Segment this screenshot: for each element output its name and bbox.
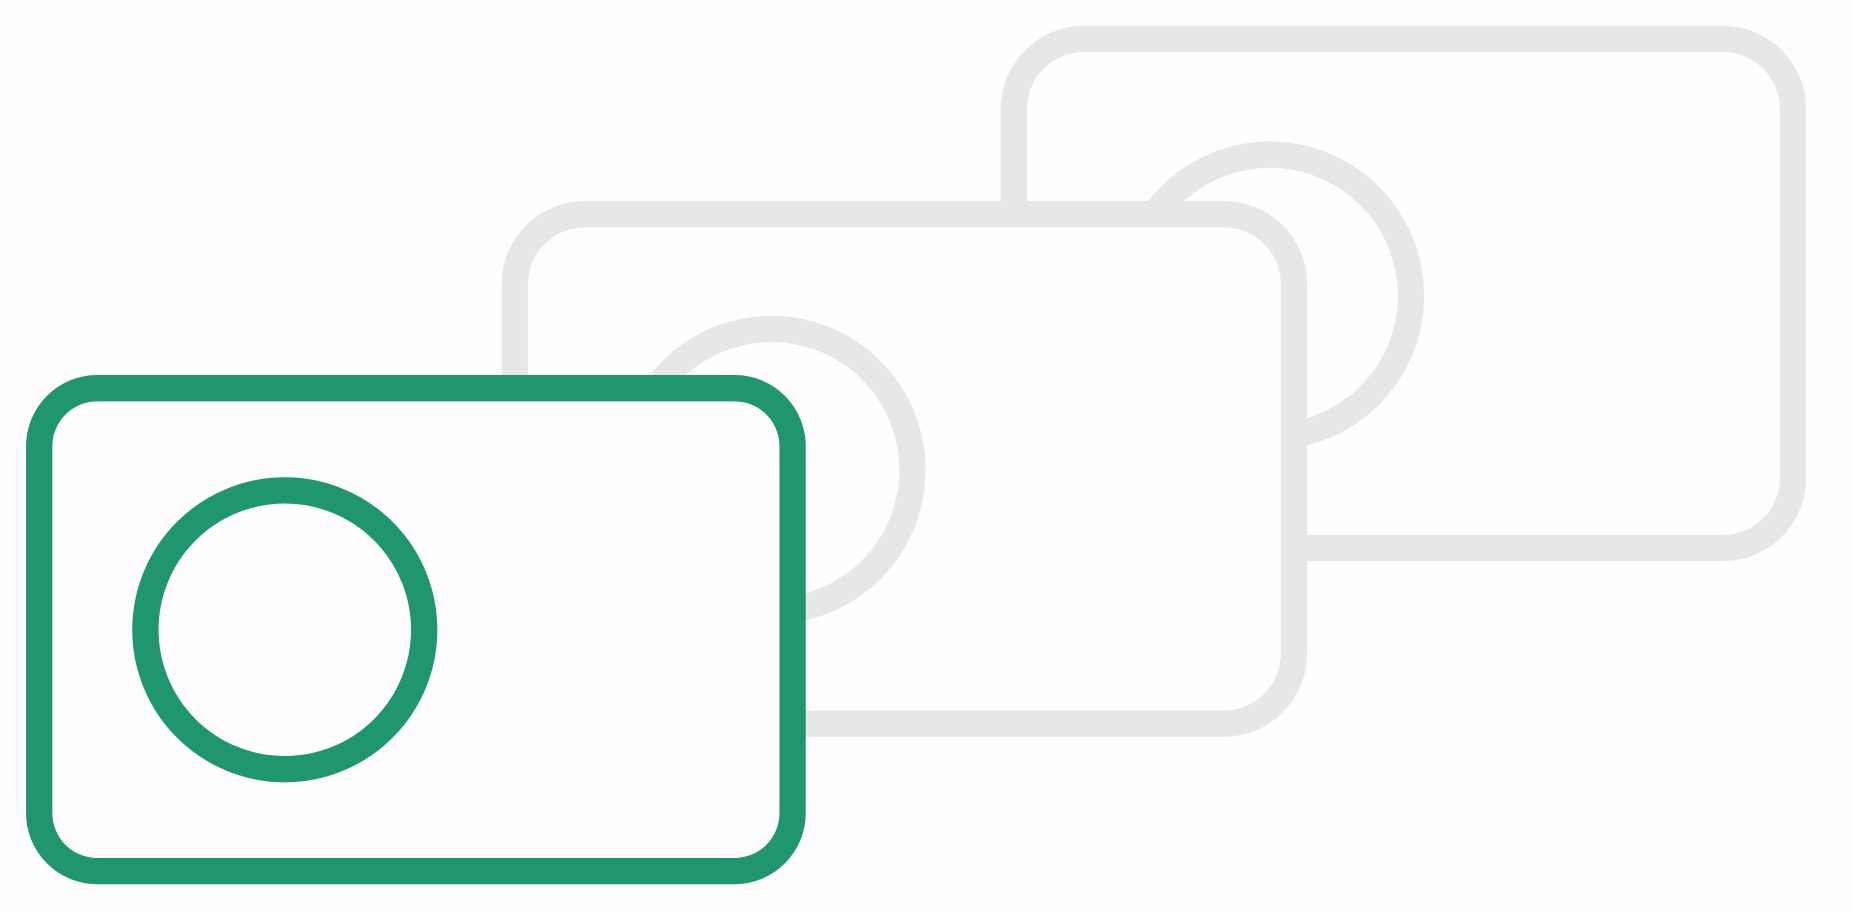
front card circle [145,490,424,769]
front card (green) [39,388,793,871]
back card circle [1129,155,1411,437]
front card frame [39,388,793,871]
back card frame [1014,39,1793,548]
middle card frame [515,214,1294,724]
middle card (gray) [515,214,1294,724]
back card (gray) [1014,39,1793,548]
middle card circle [630,329,912,611]
